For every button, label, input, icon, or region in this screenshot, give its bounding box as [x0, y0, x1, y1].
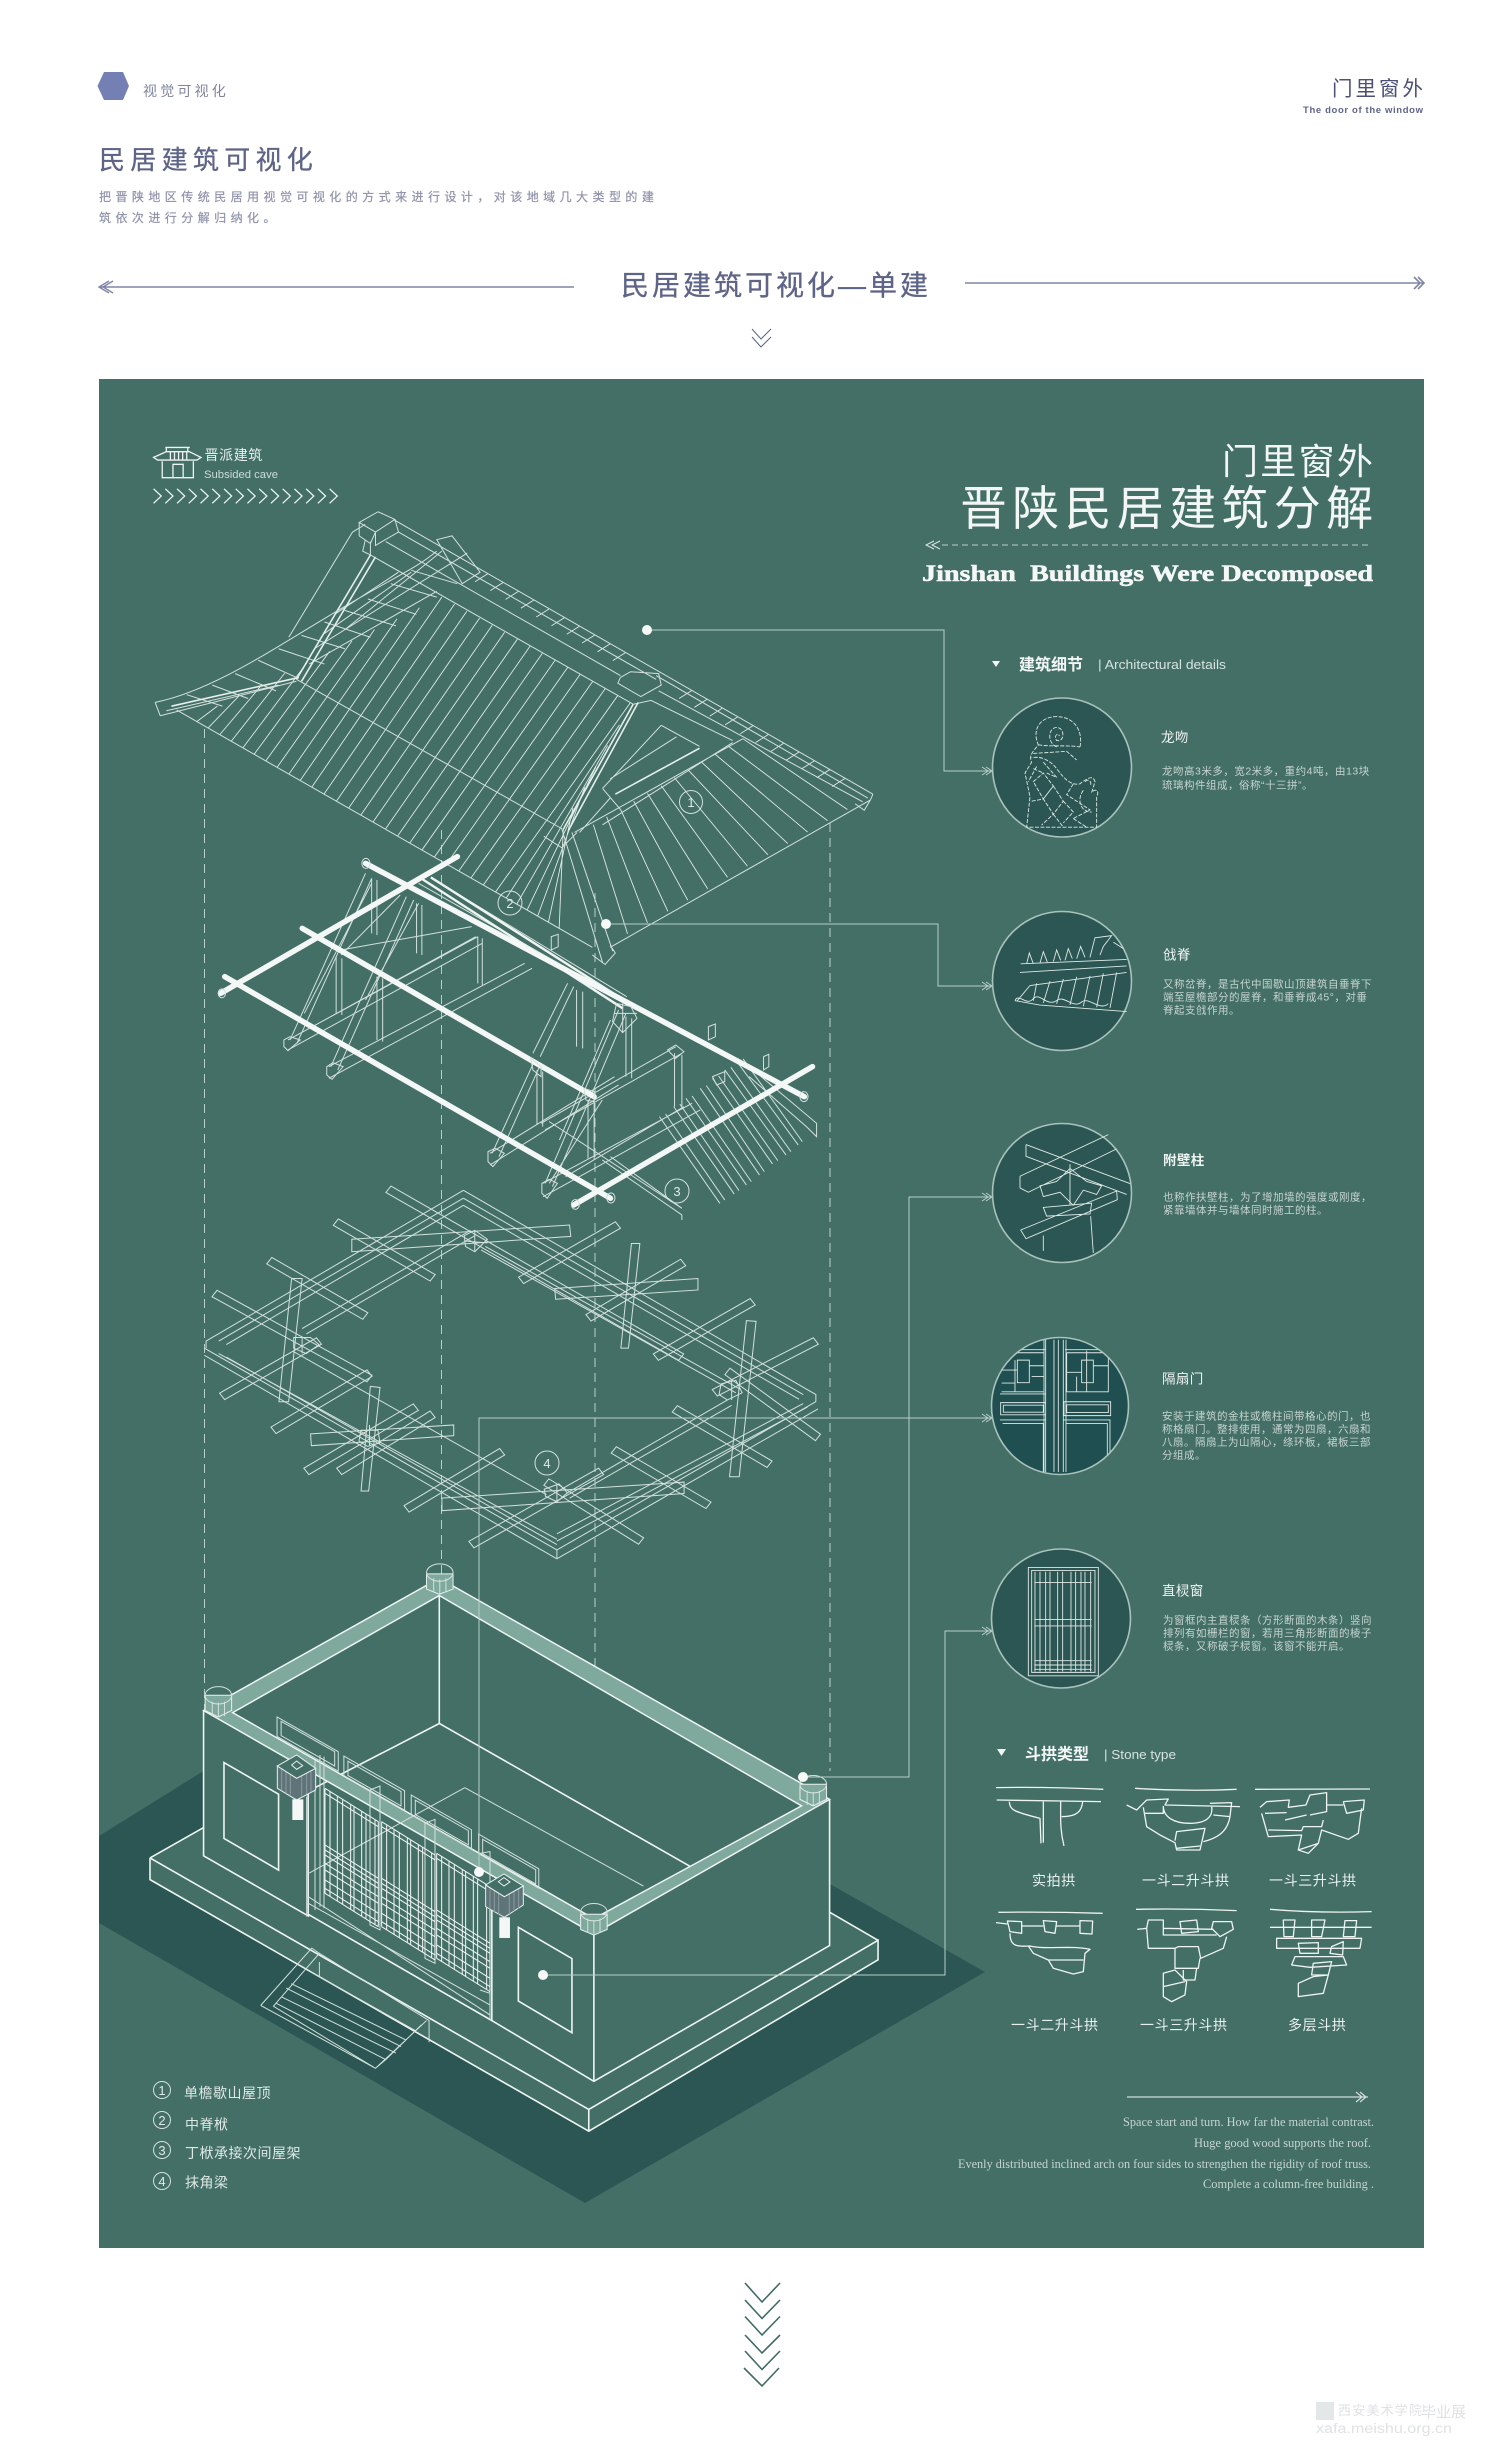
- icon: dragon: [1025, 717, 1098, 827]
- heading cn: 斗拱类型: [1025, 1746, 1089, 1764]
- description: 端至屋檐部分的屋脊，和垂脊成45°，对垂: [1163, 990, 1367, 1004]
- lantern tassel: [292, 1799, 303, 1820]
- description: 分组成。: [1162, 1448, 1206, 1462]
- windows: [224, 1763, 572, 2033]
- rule arrowhead: [926, 541, 940, 549]
- ring sides: [204, 1190, 818, 1559]
- frame rafter bundle: [659, 1059, 817, 1203]
- arrow: left: [99, 281, 574, 293]
- circle: [992, 1338, 1128, 1474]
- triangle: [992, 661, 1000, 667]
- marker ring: [535, 1451, 559, 1475]
- dashed rule: [942, 544, 1369, 546]
- bullet digit: 1: [158, 2083, 166, 2098]
- marker digit: 1: [687, 795, 695, 810]
- panel: architectural details: [992, 655, 1372, 1688]
- description: 脊起支戗作用。: [1163, 1004, 1240, 1016]
- frame tie beams: [288, 880, 700, 1220]
- lantern body: [486, 1885, 523, 1917]
- bullet: [154, 2142, 170, 2158]
- bracket labels: 实拍拱: [1032, 1872, 1076, 1888]
- lantern left: [277, 1755, 316, 1820]
- building: [150, 1564, 878, 2131]
- description: 龙吻高3米多，宽2米多，重约4吨，由13块: [1162, 764, 1370, 778]
- bullet: [154, 2112, 170, 2128]
- panel grid: [325, 1788, 378, 1927]
- description: [1162, 1410, 1371, 1462]
- sketch 2: [1127, 1788, 1240, 1850]
- legend item 3: [154, 2142, 301, 2161]
- connector lines: [474, 625, 992, 1980]
- roof rafters: [197, 597, 847, 934]
- icon: temple: [154, 447, 201, 478]
- lantern right: [486, 1874, 523, 1938]
- lantern hatch: [282, 1769, 311, 1797]
- corner columns: [205, 1574, 827, 1935]
- icon: ridge tiles: [1015, 936, 1127, 1012]
- exploded roof: [155, 512, 873, 964]
- description: [1162, 764, 1370, 792]
- connector: wall column: [803, 1193, 992, 1777]
- lantern top: [486, 1874, 523, 1897]
- name: 龙吻: [1161, 730, 1189, 745]
- description: [1163, 1614, 1372, 1652]
- ground shadow: [99, 1770, 985, 2203]
- item text: 中脊栿: [185, 2116, 228, 2132]
- door posts: [307, 1755, 490, 2020]
- bullet digit: 2: [158, 2113, 166, 2128]
- legend: [154, 2082, 301, 2190]
- description: 也称作扶壁柱，为了增加墙的强度或刚度，: [1163, 1190, 1372, 1204]
- intro text: [99, 189, 658, 225]
- base platform: [150, 1828, 878, 2131]
- door lattice: [277, 1755, 523, 2020]
- legend item 2: [154, 2112, 228, 2132]
- marker ring: [665, 1179, 689, 1203]
- note text: Complete a column-free building .: [1203, 2176, 1374, 2191]
- watermark logo: [1316, 2402, 1334, 2420]
- arrow: [1127, 2092, 1368, 2102]
- frame foot blocks: [284, 934, 769, 1198]
- detail: branch ridge: [992, 912, 1372, 1050]
- description: [1163, 978, 1372, 1016]
- bracket labels: 一斗二升斗拱: [1142, 1872, 1230, 1888]
- description: 称格扇门。整排使用，通常为四扇，六扇和: [1162, 1422, 1371, 1436]
- intro text: 筑依次进行分解归纳化。: [99, 210, 280, 225]
- english title: Jinshan Buildings Were Decomposed: [922, 561, 1373, 586]
- note text: Huge good wood supports the roof.: [1194, 2135, 1371, 2150]
- detail: partition door: [992, 1338, 1371, 1474]
- bracket sketches: [996, 1787, 1372, 2002]
- cross beams: [212, 1186, 820, 1548]
- note text: Evenly distributed inclined arch on four sides to strengthen the rigidity of roof truss.: [958, 2156, 1371, 2171]
- section heading: [992, 655, 1227, 674]
- icon: bracket set: [1020, 1135, 1130, 1253]
- marker digit: 3: [673, 1184, 681, 1199]
- column tops: [205, 1564, 827, 1934]
- title line 2: 晋陕民居建筑分解: [960, 482, 1378, 535]
- panel: bracket types: [996, 1746, 1372, 2033]
- oblique braces: [279, 1225, 756, 1511]
- intro text: 把晋陕地区传统民居用视觉可视化的方式来进行设计，对该地域几大类型的建: [99, 189, 658, 204]
- arrow: right: [965, 277, 1424, 289]
- description: 又称岔脊，是古代中国歇山顶建筑自垂脊下: [1163, 978, 1372, 990]
- section title: 民居建筑可视化—单建: [621, 270, 931, 301]
- name: 隔扇门: [1162, 1372, 1204, 1386]
- icon: straight bar window: [1028, 1567, 1098, 1676]
- item text: 抹角梁: [185, 2174, 228, 2190]
- bracket labels: 一斗三升斗拱: [1269, 1872, 1357, 1888]
- circle: [992, 1549, 1130, 1688]
- legend item 4: [154, 2172, 228, 2190]
- door panel 2: [382, 1822, 435, 1960]
- door panel 1: [325, 1788, 378, 1927]
- roof hip and crease: [171, 555, 699, 831]
- lantern hatch: [490, 1888, 519, 1915]
- item text: 单檐歇山屋顶: [184, 2085, 271, 2101]
- inner floor line: [309, 1788, 643, 1886]
- description: 棂条，又称破子棂窗。该窗不能开启。: [1163, 1640, 1350, 1652]
- heading: 民居建筑可视化: [99, 145, 318, 175]
- frame diagonal braces: [290, 873, 626, 1187]
- circle: [992, 698, 1132, 837]
- detail: wall column: [992, 1124, 1372, 1262]
- name: 戗脊: [1163, 948, 1191, 962]
- roof outline: [155, 512, 873, 964]
- category label: 视觉可视化: [143, 83, 229, 99]
- main timber beams: [221, 857, 813, 1205]
- ridge beam: [423, 877, 629, 1008]
- base lines: [150, 1828, 878, 2131]
- marker 4: [535, 1451, 559, 1475]
- ring joints: [294, 1230, 742, 1502]
- marker circle: [498, 891, 522, 915]
- sketch 4: [996, 1912, 1103, 1974]
- sketch 1: [996, 1787, 1103, 1846]
- english note: [958, 2092, 1374, 2191]
- header: [98, 72, 1426, 347]
- walls: [204, 1578, 830, 2081]
- label subtitle: Subsided cave: [204, 469, 278, 481]
- marker digit: 2: [506, 896, 514, 911]
- bracket labels: 一斗二升斗拱: [1011, 2017, 1099, 2033]
- marker 3: [665, 1179, 689, 1203]
- ridge tiles: [475, 574, 845, 787]
- watermark url: xafa.meishu.org.cn: [1316, 2421, 1452, 2436]
- brand subtitle: The door of the window: [1303, 105, 1424, 116]
- circle: [992, 912, 1132, 1050]
- lantern body: [277, 1766, 316, 1800]
- label: Jin style: [154, 447, 337, 503]
- heading en: | Stone type: [1104, 1747, 1176, 1762]
- wall lines: [204, 1596, 830, 2081]
- bracket labels: 多层斗拱: [1288, 2017, 1346, 2033]
- bracket labels: 一斗三升斗拱: [1140, 2017, 1228, 2033]
- title line 1: 门里窗外: [1222, 441, 1375, 482]
- item text: 丁栿承接次间屋架: [185, 2145, 301, 2161]
- bracket labels: [1011, 1872, 1357, 2033]
- roof frame: [218, 857, 817, 1220]
- connector: lattice window: [543, 1627, 992, 1975]
- sketch 3: [1255, 1789, 1370, 1853]
- door lines: [1000, 1340, 1111, 1472]
- sketch 5: [1136, 1909, 1237, 2002]
- panel background: [99, 379, 1424, 2248]
- icon: hexagon: [98, 72, 129, 100]
- description: 安装于建筑的金柱或檐柱间带格心的门，也: [1162, 1410, 1371, 1422]
- note text: [958, 2114, 1374, 2191]
- lantern tassel: [499, 1917, 510, 1938]
- ring band: [204, 1578, 830, 1934]
- heading en: | Architectural details: [1098, 657, 1227, 672]
- brand name: 门里窗外: [1332, 78, 1426, 100]
- dashed alignment guides: [204, 729, 830, 1905]
- connector dots: [474, 625, 808, 1980]
- name: 附壁柱: [1163, 1152, 1205, 1168]
- watermark name: 西安美术学院: [1338, 2403, 1423, 2418]
- description: [1163, 1190, 1372, 1216]
- bullet digit: 4: [158, 2174, 166, 2189]
- connector: partition door: [479, 1414, 992, 1872]
- description: 为窗框内主直棂条（方形断面的木条）竖向: [1163, 1614, 1372, 1626]
- watermark badge: 毕业展: [1421, 2404, 1466, 2421]
- title block: [922, 441, 1378, 586]
- description: 八扇。隔扇上为山隔心，绦环板，裙板三部: [1162, 1436, 1371, 1448]
- beam ends and knots: [218, 858, 808, 1209]
- main panel: [99, 379, 1424, 2248]
- note text: Space start and turn. How far the material contrast.: [1123, 2114, 1374, 2129]
- lintels: [277, 1717, 539, 1888]
- bullet digit: 3: [158, 2143, 166, 2158]
- name: 直棂窗: [1162, 1582, 1204, 1598]
- connector: ridge branch: [606, 924, 992, 990]
- detail: lattice window: [992, 1549, 1372, 1688]
- section heading: [997, 1746, 1176, 1764]
- heading cn: 建筑细节: [1019, 655, 1083, 674]
- legend item 1: [154, 2082, 271, 2101]
- sketch 6: [1270, 1909, 1372, 1997]
- beam ring: [204, 1186, 820, 1559]
- bottom chevrons: [744, 2283, 780, 2386]
- marker circle: [680, 790, 702, 814]
- description: 排列有如栅栏的窗，若用三角形断面的棱子: [1163, 1626, 1372, 1640]
- marker digit: 4: [543, 1456, 551, 1471]
- stairs: [261, 1948, 429, 2068]
- frame posts: [336, 878, 682, 1160]
- description: 紧靠墙体并与墙体同时施工的柱。: [1163, 1204, 1328, 1216]
- lantern top: [277, 1755, 316, 1778]
- chevron row: [154, 489, 337, 503]
- icon: lattice door: [1000, 1340, 1111, 1472]
- door panel 3: [437, 1853, 490, 1992]
- triangle: [997, 1749, 1006, 1756]
- icon: double chevron: [752, 329, 771, 347]
- watermark: [1316, 2402, 1466, 2436]
- bullet: [154, 2172, 170, 2190]
- label text: 晋派建筑: [204, 447, 263, 463]
- marker 2: [498, 891, 522, 915]
- connector: ridge ornament: [647, 630, 992, 775]
- detail: dragon ornament: [992, 698, 1370, 837]
- marker 1: [680, 790, 702, 814]
- description: 琉璃构件组成，俗称“十三拼”。: [1162, 778, 1313, 792]
- circle: [992, 1124, 1132, 1262]
- bullet: [154, 2082, 170, 2098]
